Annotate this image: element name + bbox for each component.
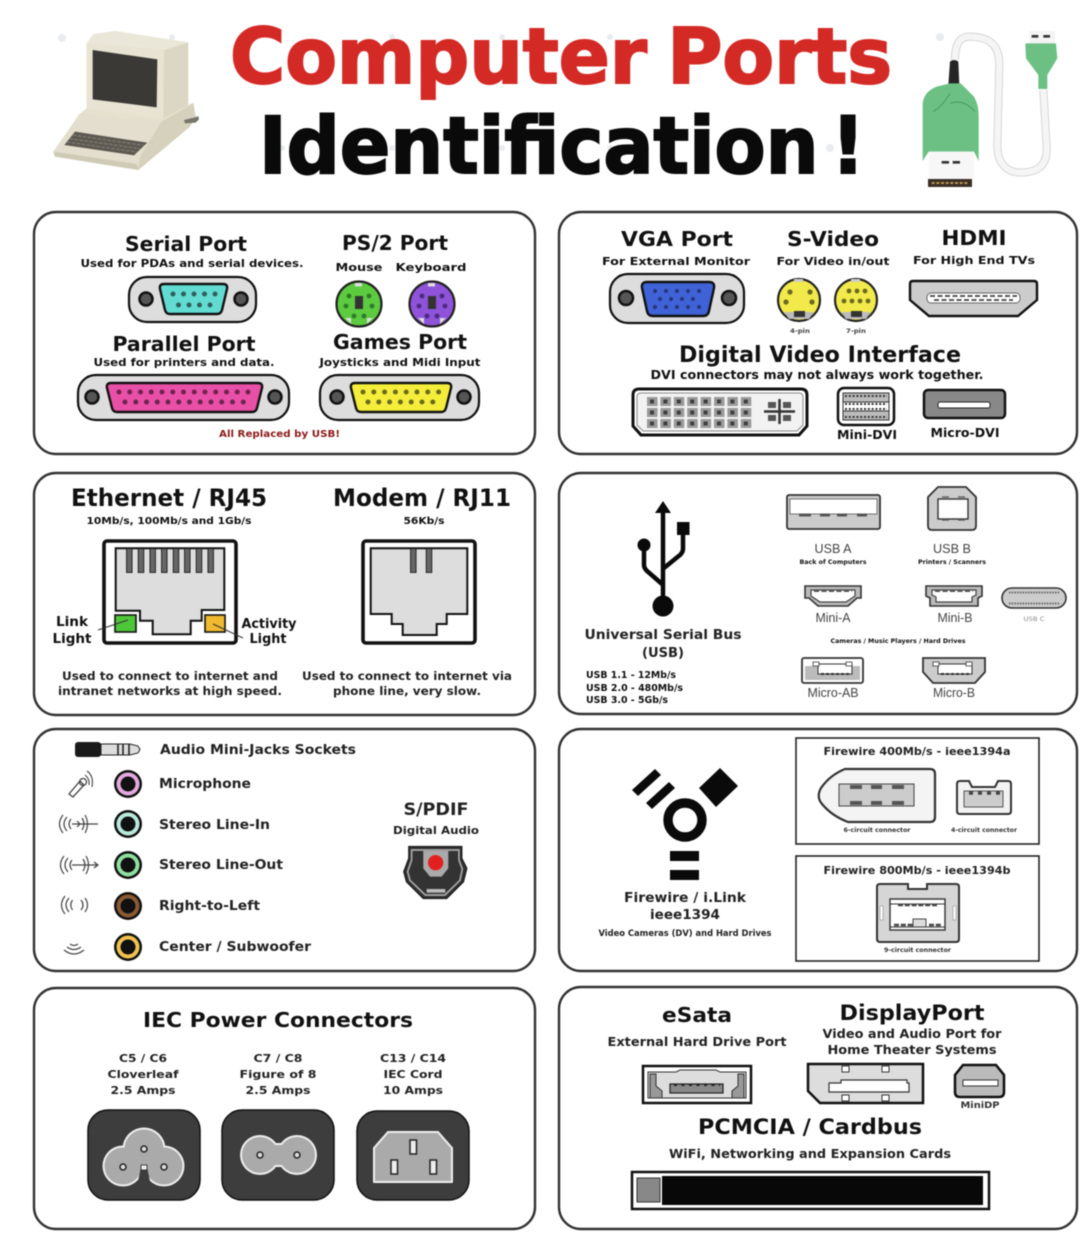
- icon: micro-b: [923, 658, 985, 683]
- text: c7/c8: [240, 1052, 316, 1097]
- heading: displayport: [822, 1001, 1002, 1057]
- heading: modem: [333, 484, 511, 527]
- text: ethernet description: Used to connect to internet and: [62, 669, 278, 683]
- heading: vga port: [602, 227, 751, 268]
- audio row: microphone: Microphone: [159, 777, 251, 792]
- icon: esata connector: [643, 1066, 751, 1103]
- heading: hdmi: For High End TVs: [913, 254, 1036, 267]
- label: micro-ab: Micro-AB: [808, 685, 858, 700]
- audio row: stereo line-out: Stereo Line-Out: [159, 858, 283, 873]
- box: firewire 400: [796, 738, 1039, 844]
- heading: iec power connectors: IEC Power Connectors: [143, 1008, 413, 1032]
- label: minidp: MiniDP: [960, 1101, 1000, 1111]
- icon: rj45 socket: [104, 541, 236, 643]
- text: firewire name: ieee1394: [650, 908, 720, 923]
- icon: s-video 4-pin: 4-pin: [790, 328, 810, 335]
- icon: serial connector: [129, 277, 256, 322]
- box: firewire 800: [796, 856, 1039, 961]
- icon: c5 cloverleaf: [88, 1110, 200, 1200]
- icon: micro-ab: [802, 658, 863, 683]
- heading: games port: [318, 330, 480, 369]
- labels: connector captions: 6-circuit connector: [844, 826, 911, 834]
- note: replaced by usb: All Replaced by USB!: [219, 429, 340, 440]
- audio row: stereo line-out: [60, 851, 283, 879]
- heading: parallel port: [94, 332, 274, 369]
- labels: connector captions: 4-circuit connector: [951, 826, 1018, 834]
- icon: mini-b: [926, 586, 982, 606]
- icon: s-video 7-pin: [835, 279, 877, 335]
- heading: games port: Games Port: [333, 330, 467, 354]
- title: Identification !: [259, 102, 865, 192]
- heading: ethernet: Ethernet / RJ45: [71, 484, 267, 512]
- heading: ps/2 port: Keyboard: [396, 261, 466, 274]
- heading: esata: eSata: [662, 1003, 732, 1027]
- audio row: stereo line-in: [60, 810, 270, 838]
- text: c7/c8: C7 / C8: [254, 1052, 302, 1065]
- icon: ps/2 mouse port: [336, 282, 382, 326]
- icon: parallel connector: [78, 375, 289, 420]
- heading: s/pdif: Digital Audio: [393, 824, 479, 837]
- heading: digital video interface: DVI connectors may not always work together.: [650, 368, 984, 382]
- heading: hdmi: HDMI: [942, 226, 1006, 250]
- heading: ethernet: [71, 484, 267, 527]
- heading: vga port: For External Monitor: [602, 255, 751, 268]
- heading: s-video: S-Video: [787, 227, 879, 251]
- label: usb c: USB C: [1024, 615, 1045, 623]
- text: firewire name: [598, 891, 772, 939]
- heading: universal serial bus: [584, 628, 742, 661]
- heading: esata: [608, 1003, 787, 1049]
- text: modem description: Used to connect to internet via: [302, 669, 512, 683]
- text: usb speeds: USB 1.1 - 12Mb/s: [586, 670, 676, 681]
- callout: activity light: [213, 617, 297, 647]
- icon: audio jack plug: [75, 742, 140, 757]
- panel: iec power: [34, 988, 535, 1229]
- panel: video ports: [559, 212, 1077, 454]
- icon: games connector: [320, 375, 479, 420]
- heading: universal serial bus: (USB): [642, 646, 684, 661]
- audio row: center subwoofer: Center / Subwoofer: [159, 940, 312, 955]
- heading: audio mini-jacks: Audio Mini-Jacks Sockets: [160, 743, 356, 758]
- heading: vga port: VGA Port: [621, 227, 733, 251]
- heading: serial port: Used for PDAs and serial devices.: [80, 257, 304, 270]
- box: firewire 800: Firewire 800Mb/s - ieee1394b: [824, 865, 1011, 877]
- heading: modem: Modem / RJ11: [333, 484, 511, 512]
- text: c5/c6: 2.5 Amps: [110, 1084, 176, 1097]
- heading: s/pdif: S/PDIF: [404, 800, 468, 820]
- text: c13/c14: C13 / C14: [380, 1052, 446, 1065]
- label: usb b: Printers / Scanners: [918, 558, 986, 566]
- icon: 4-circuit connector: [957, 781, 1011, 814]
- label: 9-circuit caption: 9-circuit connector: [884, 946, 952, 954]
- label: usb a: [800, 541, 867, 566]
- heading: pcmcia: [669, 1115, 951, 1161]
- icon: s-video 7-pin: 7-pin: [846, 328, 866, 335]
- text: c5/c6: Cloverleaf: [108, 1068, 179, 1081]
- box: firewire 400: Firewire 400Mb/s - ieee1394a: [824, 746, 1010, 758]
- audio row: stereo line-in: Stereo Line-In: [159, 818, 270, 833]
- icon: dvi connector: [633, 389, 807, 435]
- icon: s-video 4-pin: [778, 279, 820, 335]
- title: [230, 13, 892, 192]
- icon: usb trident: [638, 501, 690, 616]
- panel: audio: [34, 729, 535, 971]
- label: usb a: USB A: [814, 541, 852, 556]
- text: c13/c14: IEC Cord: [384, 1068, 442, 1081]
- heading: s/pdif: [393, 800, 479, 837]
- heading: displayport: DisplayPort: [840, 1001, 984, 1025]
- label: mini-a: Mini-A: [816, 610, 851, 625]
- label: micro-b: Micro-B: [933, 685, 975, 700]
- icon: usb a: [787, 495, 880, 529]
- heading: pcmcia: WiFi, Networking and Expansion Cards: [669, 1146, 951, 1161]
- icon: usb cable: [923, 31, 1057, 187]
- text: firewire name: Video Cameras (DV) and Hard Drives: [598, 929, 772, 939]
- label: usb b: USB B: [933, 541, 971, 556]
- heading: digital video interface: [650, 343, 984, 382]
- label: usb b: [918, 541, 986, 566]
- text: c13/c14: 10 Amps: [383, 1084, 443, 1097]
- heading: parallel port: Used for printers and data.: [94, 356, 274, 369]
- heading: pcmcia: PCMCIA / Cardbus: [698, 1115, 922, 1139]
- label: usb devices: Cameras / Music Players / Hard Drives: [830, 637, 966, 645]
- title: Computer Ports: [230, 13, 892, 102]
- heading: serial port: Serial Port: [125, 232, 247, 256]
- text: usb speeds: USB 2.0 - 480Mb/s: [586, 683, 683, 694]
- text: c7/c8: Figure of 8: [240, 1068, 316, 1081]
- labels: connector captions: [844, 826, 1018, 834]
- callout: link light: [52, 615, 128, 647]
- heading: hdmi: [913, 226, 1036, 267]
- audio row: right-to-left: [62, 892, 260, 920]
- audio row: center subwoofer: [64, 933, 312, 961]
- label: micro-dvi: Micro-DVI: [930, 426, 1000, 440]
- audio row: right-to-left: Right-to-Left: [159, 899, 260, 914]
- icon: micro-dvi connector: [924, 390, 1005, 418]
- heading: ethernet: 10Mb/s, 100Mb/s and 1Gb/s: [86, 516, 252, 527]
- icon: mini displayport connector: [955, 1065, 1004, 1097]
- icon: pcmcia slot: [632, 1172, 989, 1209]
- panel: esata, displayport, pcmcia: [559, 987, 1077, 1229]
- heading: universal serial bus: Universal Serial Bus: [584, 628, 742, 643]
- panel: firewire: [559, 729, 1077, 971]
- callout: link light: Light: [52, 632, 92, 647]
- heading: s-video: For Video in/out: [776, 255, 890, 268]
- audio row: microphone: [69, 770, 251, 798]
- text: modem description: phone line, very slow.: [333, 684, 481, 698]
- icon: retro computer: [53, 31, 199, 170]
- icon: 9-circuit connector: [877, 884, 959, 942]
- text: c7/c8: 2.5 Amps: [246, 1084, 311, 1097]
- callout: activity light: Light: [250, 632, 286, 647]
- icon: c14 iec inlet: [357, 1111, 469, 1200]
- label: usb a: Back of Computers: [800, 558, 867, 566]
- heading: displayport: Home Theater Systems: [828, 1043, 996, 1057]
- panel: usb: [559, 473, 1077, 714]
- text: modem description: [302, 669, 512, 698]
- label: mini-b: Mini-B: [938, 610, 972, 625]
- panel: legacy ports: [34, 212, 535, 454]
- icon: firewire logo: [632, 768, 738, 880]
- heading: modem: 56Kb/s: [404, 516, 445, 527]
- text: firewire name: Firewire / i.Link: [624, 891, 746, 906]
- heading: esata: External Hard Drive Port: [608, 1035, 787, 1049]
- label: mini-dvi: Mini-DVI: [837, 428, 897, 442]
- icon: displayport connector: [808, 1064, 923, 1103]
- callout: activity light: Activity: [242, 617, 297, 632]
- heading: ps/2 port: [336, 231, 466, 274]
- icon: ps/2 keyboard port: [410, 282, 454, 326]
- heading: s-video: [776, 227, 890, 268]
- icon: usb b: [928, 487, 976, 530]
- text: c5/c6: [108, 1052, 179, 1097]
- icon: c7 figure of 8: [222, 1110, 334, 1200]
- heading: displayport: Video and Audio Port for: [822, 1027, 1002, 1041]
- icon: usb c: [1002, 588, 1066, 608]
- heading: ps/2 port: PS/2 Port: [342, 231, 448, 255]
- text: usb speeds: USB 3.0 - 5Gb/s: [586, 695, 668, 706]
- heading: digital video interface: Digital Video Interface: [679, 343, 961, 368]
- icon: mini-dvi connector: [838, 388, 894, 425]
- icon: s/pdif connector: [404, 847, 467, 898]
- heading: games port: Joysticks and Midi Input: [318, 356, 480, 369]
- icon: rj11 socket: [363, 541, 475, 643]
- icon: mini-a: [805, 586, 861, 606]
- text: c5/c6: C5 / C6: [119, 1052, 167, 1065]
- callout: link light: Link: [56, 615, 88, 630]
- text: ethernet description: intranet networks at high speed.: [58, 684, 282, 698]
- panel: ethernet and modem: [34, 473, 535, 715]
- icon: hdmi connector: [910, 281, 1037, 316]
- heading: parallel port: Parallel Port: [112, 332, 256, 356]
- text: usb speeds: [586, 670, 683, 706]
- heading: serial port: [80, 232, 304, 270]
- heading: ps/2 port: Mouse: [336, 261, 382, 274]
- text: c13/c14: [380, 1052, 446, 1097]
- icon: vga connector: [610, 274, 744, 323]
- icon: 6-circuit connector: [819, 769, 935, 822]
- text: ethernet description: [58, 669, 282, 698]
